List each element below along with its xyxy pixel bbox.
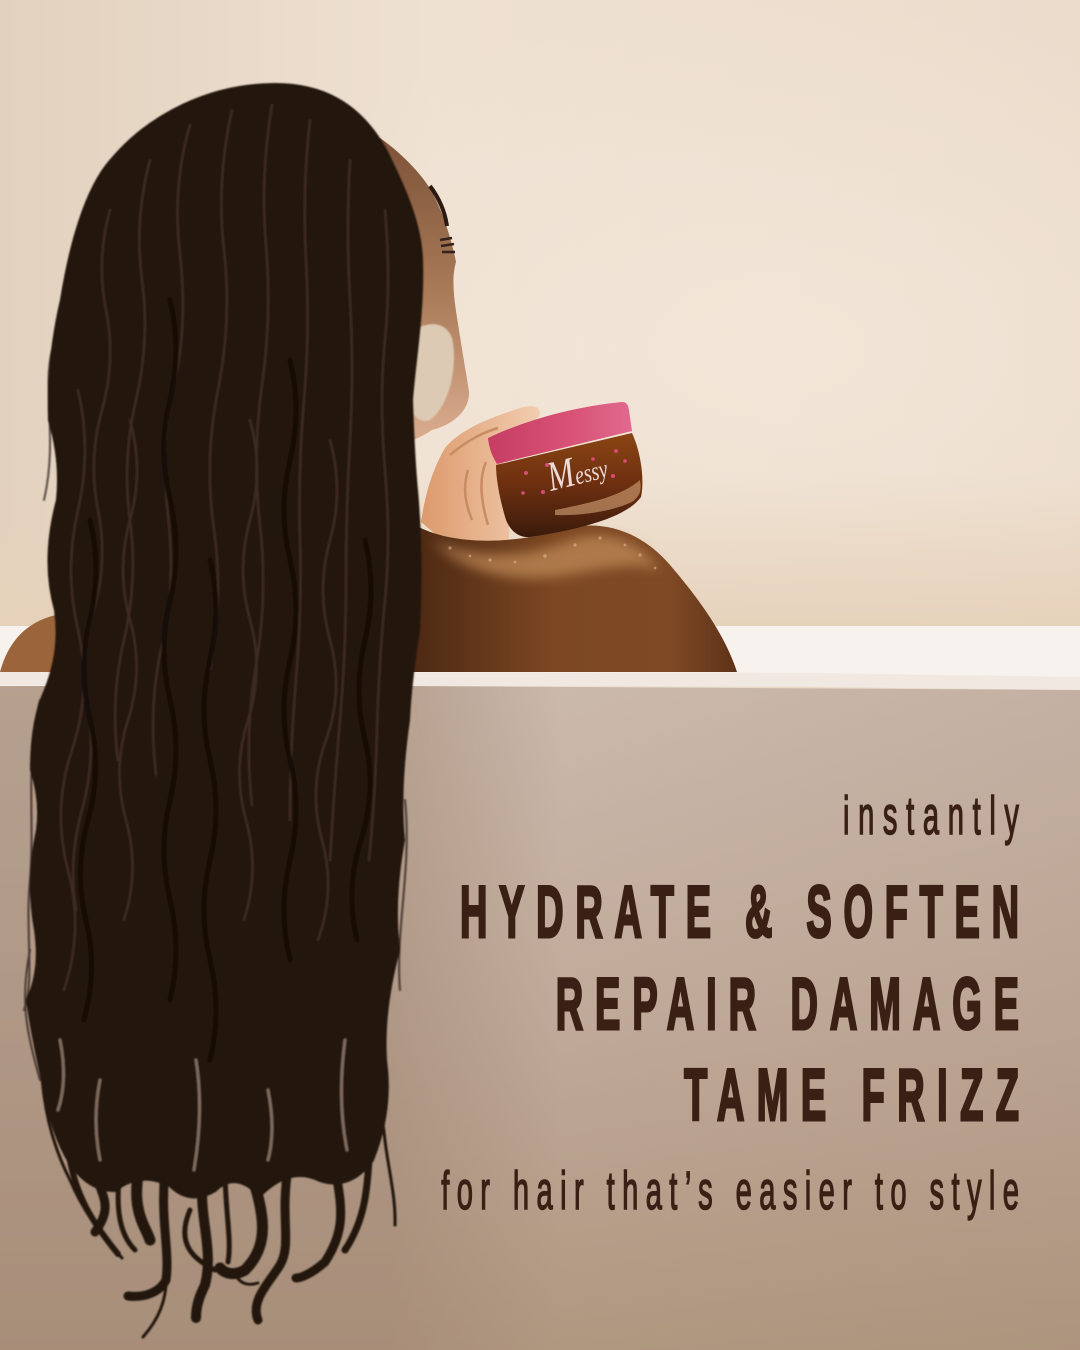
hand: [421, 406, 540, 545]
skin highlights: [432, 535, 660, 578]
hair highlights: [61, 105, 388, 990]
shoulder and back: [405, 525, 737, 672]
text: closing line: for hair that’s easier to style: [441, 1162, 1019, 1221]
flyaway strands: [24, 350, 407, 1080]
gaps inside hair: [58, 1040, 347, 1170]
heading line: tame frizz: TAME FRIZZ: [684, 1055, 1019, 1136]
jar stars: [521, 449, 627, 495]
left arm: [0, 615, 70, 672]
hair mass: [28, 85, 421, 1196]
background wall: [0, 0, 1080, 630]
bottom strands: [41, 1000, 395, 1337]
long wet hair: [24, 85, 421, 1337]
neck and face: [380, 138, 469, 444]
text: instantly: instantly: [843, 787, 1019, 846]
jar lid: [488, 402, 632, 464]
heading line: repair damage: REPAIR DAMAGE: [556, 964, 1019, 1045]
heading: benefits: [460, 872, 1019, 1136]
heading line: hydrate and soften: HYDRATE & SOFTEN: [460, 872, 1019, 953]
woman: skin, face and hand: [0, 138, 737, 672]
product jar: [488, 402, 642, 537]
jar logo: Messy: [542, 441, 612, 501]
bathtub: [0, 626, 1080, 1350]
jar body: [496, 433, 642, 537]
